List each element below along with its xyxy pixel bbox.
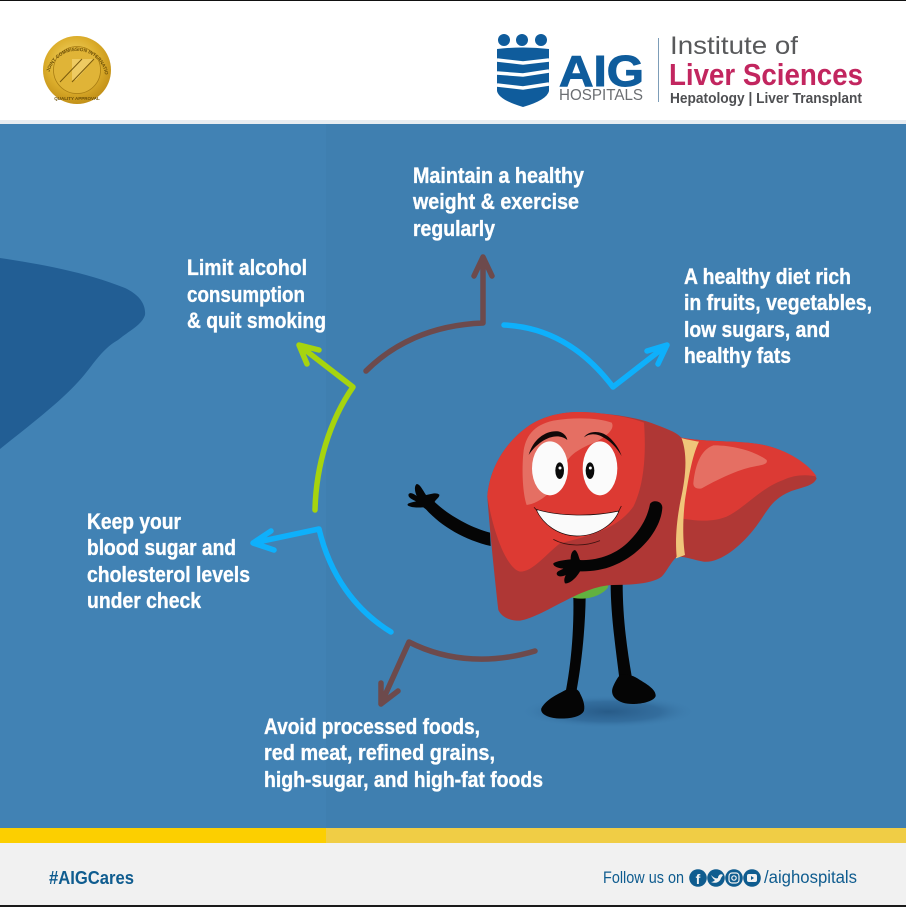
icon: youtube (743, 869, 761, 887)
text: avoid processed foods: Avoid processed foods, (264, 714, 480, 739)
logo: AIG Hospitals (497, 32, 863, 107)
text: healthy diet (684, 264, 872, 368)
legs and feet (541, 583, 656, 719)
arrow: diet (blue) (504, 325, 667, 387)
text: healthy diet: low sugars, and (684, 317, 830, 342)
text: blood sugar (87, 509, 250, 613)
arrow: weight (brown) (366, 257, 492, 371)
text: maintain a healthy weight (412, 163, 585, 241)
text: healthy diet: healthy fats (684, 343, 791, 368)
arrow: alcohol (green) (299, 345, 353, 510)
text: limit alcohol (187, 255, 326, 333)
ground shadow (520, 695, 697, 728)
liver mascot (408, 412, 817, 728)
footer band (0, 843, 906, 907)
icon: instagram (725, 869, 743, 887)
faded liver silhouette at left (0, 258, 145, 449)
arrow: processed foods (brown) (381, 642, 535, 704)
text: maintain a healthy weight: weight & exercise (412, 189, 579, 214)
left arm (408, 484, 491, 546)
text: maintain a healthy weight: regularly (413, 216, 496, 241)
right lobe (677, 437, 817, 562)
eyebrows (529, 431, 622, 456)
cycle arrows (253, 257, 667, 704)
icon: facebook (689, 869, 707, 887)
arrow: blood sugar (blue) (253, 529, 391, 632)
text: limit alcohol: Limit alcohol (187, 255, 307, 280)
text: limit alcohol: consumption (187, 282, 305, 307)
gallbladder (568, 580, 608, 599)
text: avoid processed foods: red meat, refined grains, (264, 740, 495, 765)
text: maintain a healthy weight: Maintain a healthy (413, 163, 585, 188)
hashtag: #AIGCares (49, 867, 134, 888)
text: blood sugar: under check (87, 588, 202, 613)
text: healthy diet: in fruits, vegetables, (684, 290, 872, 315)
eyes (532, 441, 568, 495)
Institute of: Institute of (670, 32, 798, 60)
Hepatology | Liver Transplant: Hepatology | Liver Transplant (670, 91, 862, 107)
icon: AIG shield (497, 34, 549, 107)
icon: accreditation gold seal (43, 36, 111, 104)
AIG wordmark: AIG (559, 47, 644, 96)
icon: facebook: f (696, 871, 701, 887)
smile (536, 509, 619, 536)
icon: twitter (707, 869, 725, 887)
lit face area (487, 412, 645, 572)
HOSPITALS wordmark: HOSPITALS (559, 87, 643, 104)
yellow band (0, 828, 906, 843)
text: avoid processed foods: high-sugar, and high-fat foods (264, 767, 543, 792)
follow us: Follow us on (603, 868, 684, 887)
blue background panel (0, 124, 906, 828)
header band (0, 0, 906, 124)
text: avoid processed foods (264, 714, 543, 792)
text: limit alcohol: & quit smoking (187, 308, 326, 333)
icon: accreditation gold seal: QUALITY APPROVAL (54, 96, 100, 101)
text: blood sugar: Keep your (87, 509, 181, 534)
text: blood sugar: blood sugar and (87, 535, 236, 560)
follow us (603, 867, 857, 887)
ligament (675, 437, 699, 558)
text: healthy diet: A healthy diet rich (684, 264, 851, 289)
text: blood sugar: cholesterol levels (87, 562, 250, 587)
main lobe (487, 412, 685, 621)
Liver Sciences: Liver Sciences (669, 57, 863, 92)
face highlight (523, 418, 613, 505)
right arm and hand (553, 501, 662, 583)
handle: /aighospitals (764, 867, 857, 887)
